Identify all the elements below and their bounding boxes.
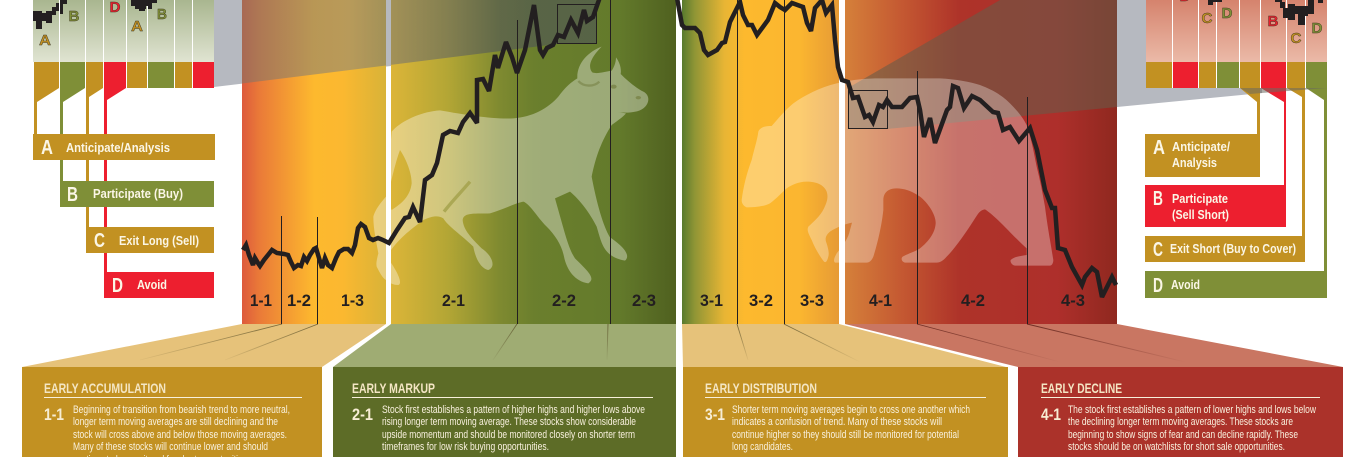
legend C: Exit Short (Buy to Cover): [1170, 241, 1296, 256]
legend A: Anticipate/: [1172, 139, 1230, 154]
stage labels: 4-2: [961, 292, 985, 310]
stage labels: 1-3: [341, 292, 364, 310]
heading: EARLY MARKUP: [352, 380, 435, 396]
body text: [732, 404, 970, 453]
legend D: D: [112, 275, 123, 297]
body text: rising longer term moving average. These stocks show considerable: [382, 416, 636, 428]
legend D: [1145, 271, 1327, 298]
panel: markup stage: [391, 0, 676, 324]
legend C: C: [94, 230, 105, 252]
stage labels: 3-2: [749, 292, 773, 310]
mini stock line left: [33, 0, 157, 29]
connectors right: [1240, 88, 1327, 271]
mini stock line right: [1208, 0, 1323, 25]
funnel: decline: [845, 324, 1343, 367]
mini letters left: A: [39, 32, 51, 49]
body text: [1068, 404, 1316, 453]
stage dividers: [282, 0, 1028, 324]
mini letters right: [1180, 0, 1323, 47]
zoom box: bull chart: [558, 4, 596, 44]
panel: decline stage: [845, 0, 1117, 324]
legend D: D: [1153, 275, 1163, 297]
legend D: Avoid: [137, 277, 167, 292]
funnel: distribution: [682, 324, 1006, 367]
body text: Many of these stocks will continue lower and should: [73, 441, 268, 453]
gray wedge: right: [1117, 0, 1262, 107]
stage labels: 1-2: [287, 292, 311, 310]
stage labels: 2-2: [552, 292, 576, 310]
mini letters left: [39, 0, 167, 49]
stage labels: 2-3: [632, 292, 656, 310]
body text: longer term moving averages are still declining and the: [73, 416, 278, 428]
icon: bear: [742, 78, 1053, 266]
stage labels: 1-1: [250, 292, 272, 310]
heading: EARLY DECLINE: [1041, 380, 1122, 396]
legend B: Participate (Buy): [93, 186, 183, 201]
stage number: 4-1: [1041, 405, 1061, 424]
gray wedge: left: [214, 0, 391, 87]
mini letters right: C: [1202, 10, 1213, 27]
legend A: Anticipate/Analysis: [66, 140, 170, 155]
legend C: [1145, 236, 1305, 262]
stage labels: 3-3: [800, 292, 824, 310]
stage number: 3-1: [705, 405, 725, 424]
body text: [382, 404, 645, 453]
zoom wedge overlay: right: [848, 0, 1117, 129]
stage labels: [250, 292, 1085, 310]
legend left: [33, 134, 215, 298]
body text: upside momentum and should be monitored closely on shorter term: [382, 429, 635, 441]
body text: Stock first establishes a pattern of higher highs and higher lows above: [382, 404, 645, 416]
legend C: [86, 227, 214, 253]
body text: Shorter term moving averages begin to cross one another which: [732, 404, 970, 416]
mini letters left: B: [157, 6, 167, 23]
legend right: [1145, 134, 1327, 298]
legend A: A: [41, 137, 53, 159]
connectors left: [34, 88, 126, 272]
panel: early decline: [1018, 367, 1343, 457]
stage labels: 3-1: [700, 292, 723, 310]
mini letters right: B: [1268, 13, 1279, 30]
body text: Beginning of transition from bearish trend to more neutral,: [73, 404, 290, 416]
legend B: (Sell Short): [1172, 207, 1229, 222]
heading: EARLY ACCUMULATION: [44, 380, 166, 396]
legend A: [1145, 134, 1260, 177]
body text: continue higher so they should still be monitored for potential: [732, 429, 959, 441]
body text: beginning to show signs of fear and can decline rapidly. These: [1068, 429, 1298, 441]
legend A: Analysis: [1172, 155, 1217, 170]
funnel: accumulation: [22, 324, 386, 367]
funnel: markup: [333, 324, 676, 367]
panel: mini chart bullish: [33, 0, 214, 88]
legend C: C: [1153, 239, 1163, 261]
body text: the declining longer term moving averages. These stocks are: [1068, 416, 1293, 428]
body text: [73, 404, 290, 457]
heading: EARLY DISTRIBUTION: [705, 380, 817, 396]
body text: stock will cross above and below those moving averages.: [73, 429, 287, 441]
stage labels: 4-3: [1061, 292, 1085, 310]
stock line: rising: [243, 0, 600, 268]
body text: long candidates.: [732, 441, 793, 453]
panel: accumulation stage: [242, 0, 386, 324]
legend A: [33, 134, 215, 160]
mini letters left: A: [131, 18, 143, 35]
legend D: [104, 272, 214, 298]
legend B: [1145, 185, 1286, 227]
legend C: Exit Long (Sell): [119, 233, 199, 248]
legend D: Avoid: [1171, 277, 1200, 292]
zoom wedge overlay: left: [242, 0, 596, 84]
icon: bull: [373, 47, 648, 285]
stage labels: 4-1: [869, 292, 892, 310]
legend B: B: [1153, 188, 1163, 210]
legend B: B: [67, 184, 78, 206]
stock line: falling: [677, 0, 1116, 297]
panel: early markup: [333, 367, 676, 457]
stage number: 2-1: [352, 405, 373, 424]
stage labels: 2-1: [442, 292, 465, 310]
panel: mini chart bearish: [1146, 0, 1327, 88]
legend A: A: [1153, 137, 1165, 159]
mini letters right: D: [1312, 20, 1323, 37]
body text: stocks should be on watchlists for short sale opportunities.: [1068, 441, 1285, 453]
body text: indicates a confusion of trend. Many of these stocks will: [732, 416, 942, 428]
mini letters right: C: [1290, 30, 1302, 47]
panel: early distribution: [683, 367, 1008, 457]
panel: early accumulation: [22, 367, 322, 457]
body text: timeframes for low risk buying opportunities.: [382, 441, 549, 453]
mini letters right: D: [1222, 5, 1233, 22]
mini letters left: B: [68, 8, 80, 25]
legend B: Participate: [1172, 191, 1228, 206]
legend B: [60, 181, 214, 207]
panel: distribution stage: [682, 0, 839, 324]
zoom box: bear chart: [848, 90, 888, 128]
stage number: 1-1: [44, 405, 64, 424]
